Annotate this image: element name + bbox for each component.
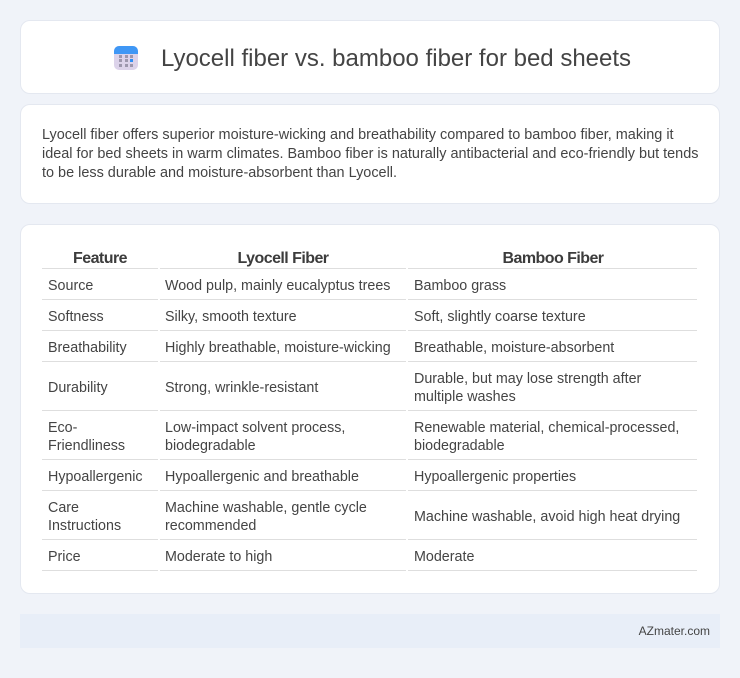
comparison table: Machine washable, gentle cycle (165, 500, 367, 516)
panel: title card (20, 20, 720, 94)
comparison table: Lyocell Fiber (238, 250, 328, 267)
comparison table: Source (48, 278, 93, 294)
comparison table: Wood pulp, mainly eucalyptus trees (165, 278, 390, 294)
title: Lyocell fiber vs. bamboo fiber for bed sheets (161, 45, 631, 72)
icon: calendar (114, 46, 138, 70)
comparison table: Care (48, 500, 79, 516)
comparison table: Eco- (48, 420, 77, 436)
comparison table: Renewable material, chemical-processed, (414, 420, 679, 436)
comparison table: Hypoallergenic properties (414, 469, 576, 485)
comparison table: Instructions (48, 518, 121, 534)
comparison table (42, 250, 697, 571)
panel: comparison table (20, 224, 720, 594)
comparison table: Low-impact solvent process, (165, 420, 345, 436)
comparison table: Moderate (414, 549, 474, 565)
comparison table: Softness (48, 309, 104, 325)
comparison table: multiple washes (414, 389, 516, 405)
comparison table: Feature (73, 250, 127, 267)
comparison table: Soft, slightly coarse texture (414, 309, 586, 325)
footer bar (20, 614, 720, 648)
comparison table: recommended (165, 518, 256, 534)
comparison table: Bamboo Fiber (503, 250, 603, 267)
comparison table: Price (48, 549, 81, 565)
comparison table: Bamboo grass (414, 278, 506, 294)
text block: summary: to be less durable and moisture-absorbent than Lyocell. (42, 165, 397, 181)
text block: summary (42, 127, 698, 181)
comparison table: biodegradable (414, 438, 505, 454)
panel: summary (20, 104, 720, 204)
comparison table: Durability (48, 380, 108, 396)
comparison table: Hypoallergenic and breathable (165, 469, 359, 485)
comparison table: Machine washable, avoid high heat drying (414, 509, 680, 525)
footer: site credit: AZmater.com (639, 624, 710, 638)
comparison table: Hypoallergenic (48, 469, 143, 485)
comparison table: Silky, smooth texture (165, 309, 297, 325)
comparison table: Breathable, moisture-absorbent (414, 340, 614, 356)
text block: summary: ideal for bed sheets in warm climates. Bamboo fiber is naturally antibacterial and eco-friendly but tends (42, 146, 698, 162)
comparison table: biodegradable (165, 438, 256, 454)
text block: summary: Lyocell fiber offers superior moisture-wicking and breathability compared to bamboo fiber, making it (42, 127, 674, 143)
comparison table: Strong, wrinkle-resistant (165, 380, 318, 396)
comparison table: Friendliness (48, 438, 125, 454)
comparison table: Breathability (48, 340, 127, 356)
comparison table: Moderate to high (165, 549, 272, 565)
comparison table: Durable, but may lose strength after (414, 371, 641, 387)
comparison table: Highly breathable, moisture-wicking (165, 340, 391, 356)
